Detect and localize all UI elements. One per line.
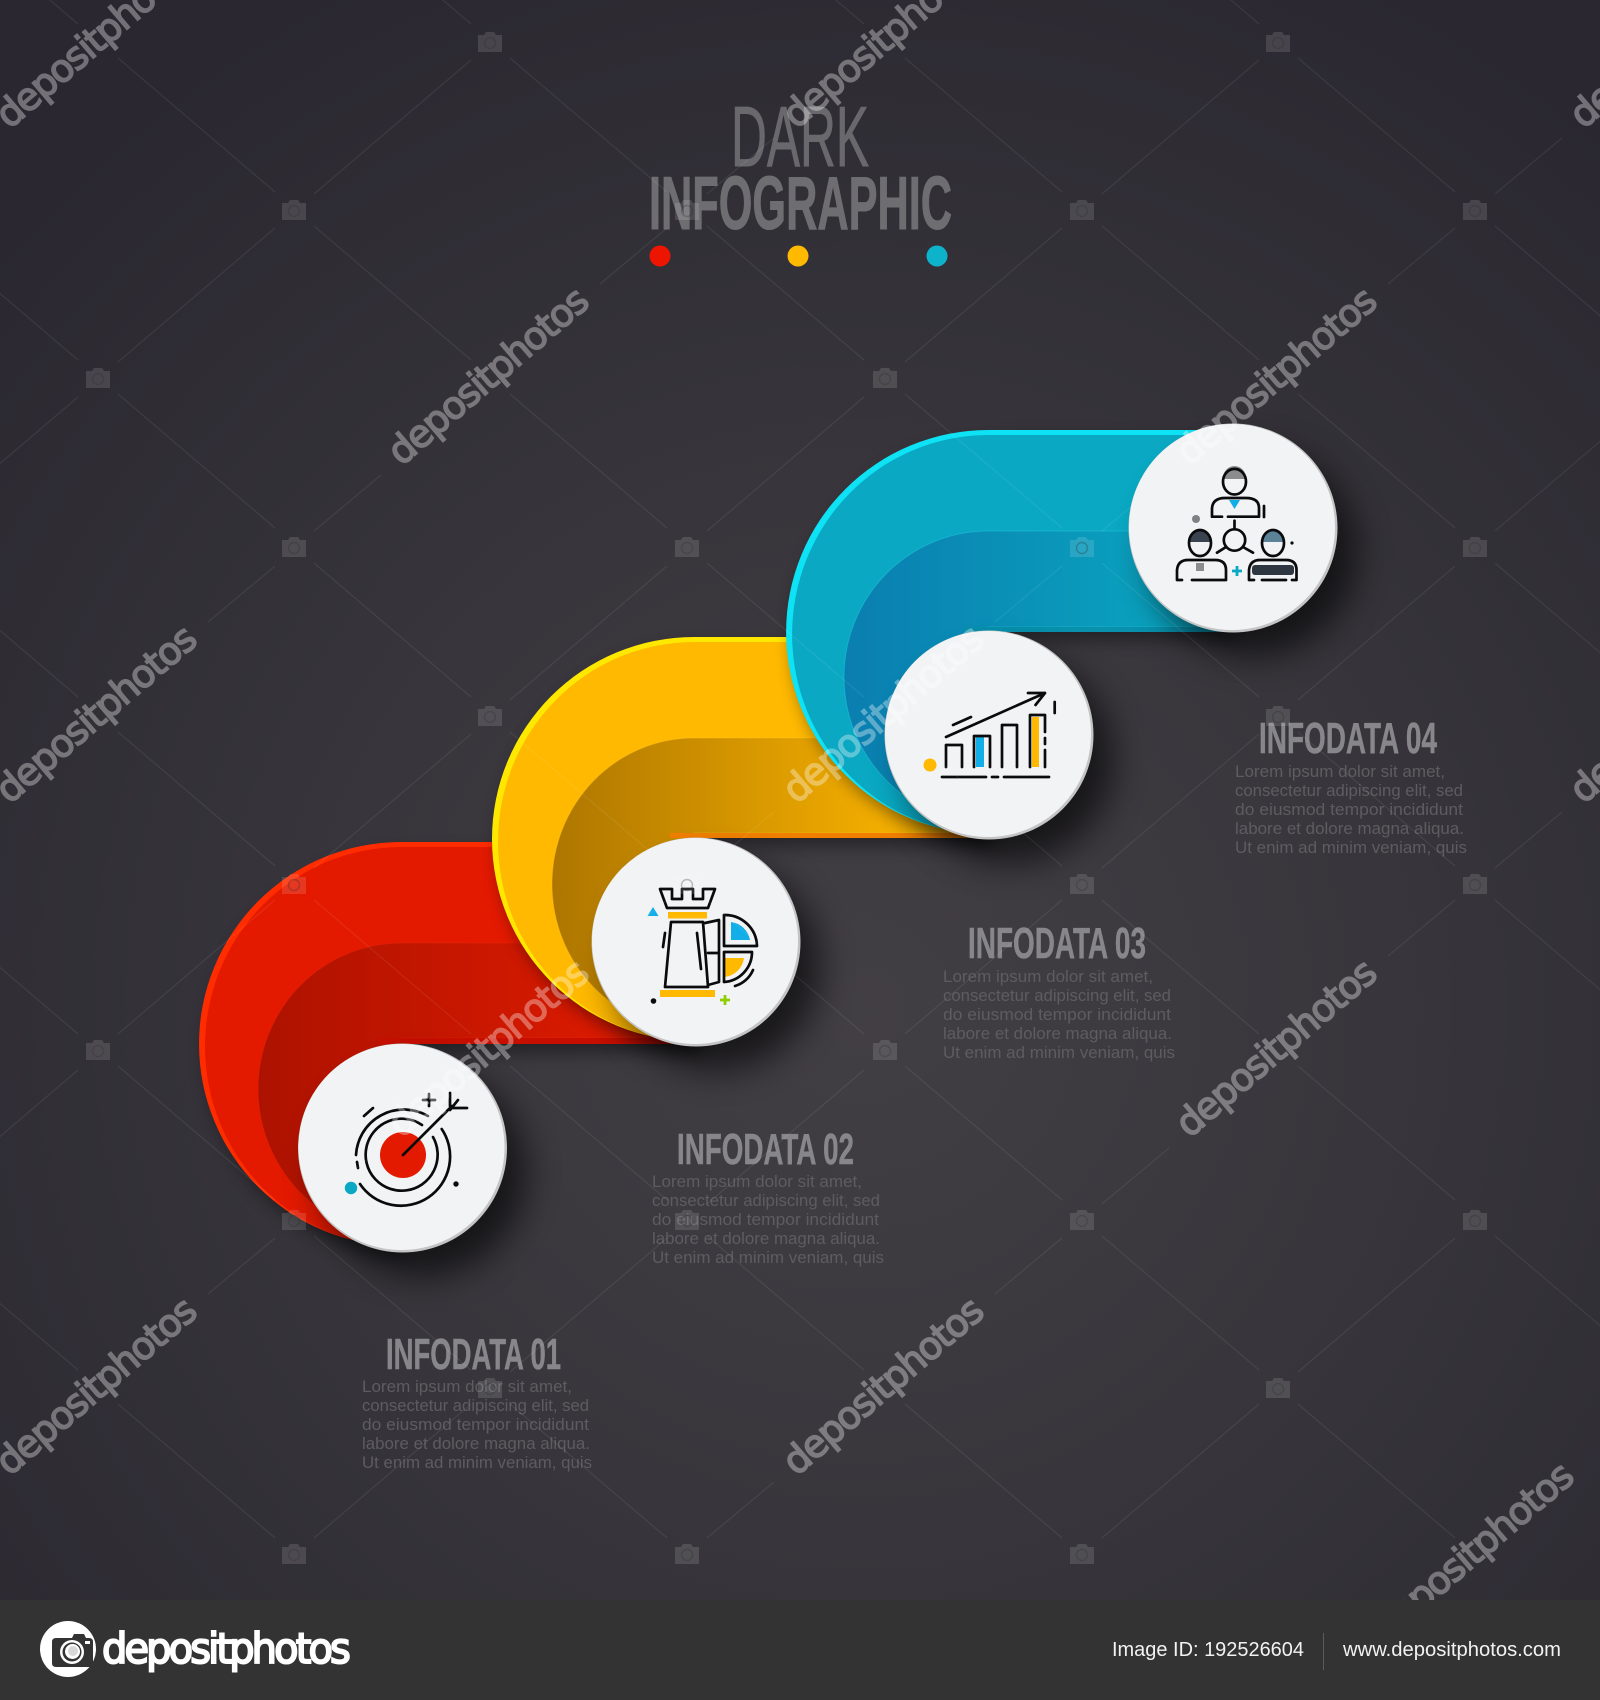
watermark overlay: depositphotos [774, 1288, 992, 1484]
text block: infodata 03: labore et dolore magna aliqua. [943, 1025, 1172, 1043]
text block: infodata 03: Ut enim ad minim veniam, quis [943, 1044, 1175, 1062]
website: www.depositphotos.com [1342, 1639, 1561, 1661]
watermark overlay: depositphotos [1167, 950, 1385, 1146]
text block: infodata 03: consectetur adipiscing elit, sed [943, 987, 1171, 1005]
text block: infodata 04: consectetur adipiscing elit, sed [1235, 782, 1463, 800]
text block: infodata 04: Ut enim ad minim veniam, quis [1235, 839, 1467, 857]
text block: infodata 04: INFODATA 04 [1259, 714, 1437, 763]
text block: infodata 04: Lorem ipsum dolor sit amet, [1235, 763, 1445, 781]
watermark overlay: depositphotos [1167, 278, 1385, 474]
circle badge 02: strategy icon [592, 838, 820, 1070]
title: DARK [731, 90, 869, 185]
text block: infodata 03: do eiusmod tempor incididunt [943, 1006, 1171, 1024]
teal ribbon [786, 430, 1238, 842]
red ribbon [199, 842, 702, 1255]
title dots [650, 246, 948, 266]
circle badge 01: target icon [298, 1044, 526, 1276]
text block: infodata 02 [652, 1125, 884, 1267]
title: INFOGRAPHIC [649, 161, 952, 245]
text block: infodata 03: INFODATA 03 [968, 919, 1146, 968]
icon: chess tower and pie [648, 889, 757, 1005]
icon: target with arrow [345, 1093, 467, 1206]
icon: rising bar chart [924, 693, 1055, 777]
text block: infodata 03 [943, 919, 1175, 1062]
text block: infodata 03: Lorem ipsum dolor sit amet, [943, 968, 1153, 986]
text block: infodata 02: Lorem ipsum dolor sit amet, [652, 1173, 862, 1191]
text block: infodata 04: labore et dolore magna aliqua. [1235, 820, 1464, 838]
text block: infodata 01: consectetur adipiscing elit, sed [362, 1397, 589, 1415]
text block: infodata 01 [362, 1330, 592, 1472]
watermark overlay: depositphotos [379, 278, 597, 474]
circle badge 04: team icon [1128, 424, 1357, 656]
text block: infodata 04 [1235, 714, 1467, 857]
text block: infodata 02: consectetur adipiscing elit, sed [652, 1192, 880, 1210]
watermark overlay: depositphotos [379, 950, 597, 1146]
watermark overlay: depositphotos [774, 616, 992, 812]
yellow ribbon [492, 637, 994, 1049]
image id: Image ID: 192526604 [1112, 1639, 1304, 1661]
text block: infodata 01: Lorem ipsum dolor sit amet, [362, 1378, 572, 1396]
text block: infodata 02: do eiusmod tempor incididunt [652, 1211, 879, 1229]
text block: infodata 01: INFODATA 01 [386, 1330, 561, 1379]
text block: infodata 02: Ut enim ad minim veniam, quis [652, 1249, 884, 1267]
text block: infodata 01: Ut enim ad minim veniam, quis [362, 1454, 592, 1472]
footer logo icon [40, 1621, 96, 1677]
watermark overlay: depositphotos [1364, 1453, 1582, 1649]
text block: infodata 01: do eiusmod tempor incididunt [362, 1416, 589, 1434]
footer logo wordmark: depositphotos [102, 1624, 349, 1673]
footer bar [0, 1600, 1600, 1700]
circle badge 03: growth chart icon [884, 630, 1113, 863]
icon: three people network [1177, 466, 1296, 580]
text block: infodata 04: do eiusmod tempor incididunt [1235, 801, 1463, 819]
text block: infodata 02: INFODATA 02 [677, 1125, 854, 1174]
text block: infodata 02: labore et dolore magna aliqua. [652, 1230, 880, 1248]
title [649, 90, 952, 245]
text block: infodata 01: labore et dolore magna aliqua. [362, 1435, 590, 1453]
